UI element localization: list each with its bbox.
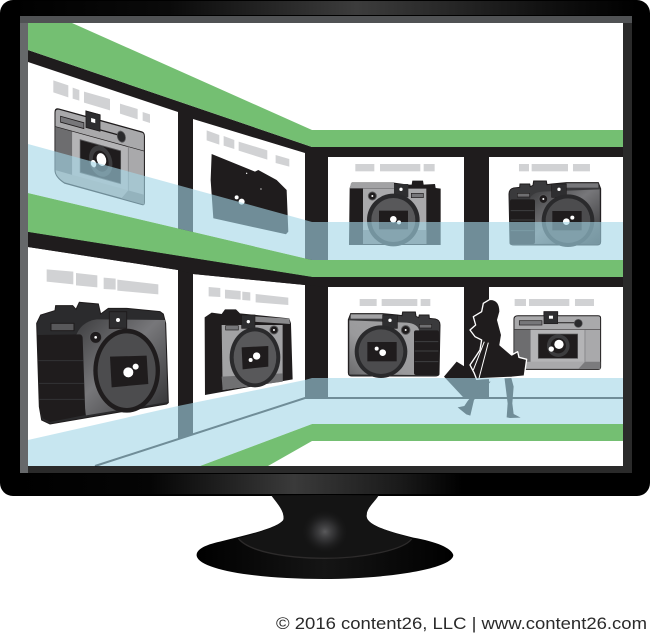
legs — [458, 377, 521, 418]
body with outline — [470, 299, 527, 379]
third display labels — [355, 164, 435, 171]
camera: black sided angled — [205, 309, 293, 395]
camera: grip right — [348, 312, 440, 378]
panel: upper second display — [193, 119, 305, 260]
middle green band — [28, 193, 623, 277]
panel: upper third display — [328, 157, 464, 262]
floor white area — [95, 398, 623, 466]
copyright line: © 2016 content26, LLC | www.content26.com — [276, 614, 647, 633]
upper left labels — [53, 80, 150, 123]
screen — [28, 23, 623, 466]
left bag — [444, 362, 482, 397]
black beam under middle band — [28, 232, 623, 287]
camera: grip left — [509, 181, 601, 247]
camera: large black angled — [37, 302, 168, 424]
camera: black silhouette — [211, 154, 288, 234]
second display labels — [207, 130, 289, 167]
panel: lower fourth display — [489, 287, 623, 398]
panel: upper left display — [28, 62, 178, 250]
black wall structure — [28, 50, 623, 466]
fourth display labels — [519, 164, 590, 171]
panel: upper fourth display — [489, 157, 623, 262]
lower third labels — [360, 299, 430, 306]
upper water reflection — [28, 144, 623, 260]
floor line — [95, 398, 623, 466]
lower fourth labels — [515, 299, 594, 306]
panel: lower left display — [28, 247, 178, 466]
panel: lower second display — [193, 274, 305, 434]
monitor bezel — [0, 0, 650, 496]
lower left labels — [47, 269, 158, 294]
camera: silver compact front — [514, 312, 601, 369]
camera: black sided front view — [349, 181, 441, 246]
lower water reflection — [28, 378, 623, 466]
panel: lower third display — [328, 287, 464, 398]
top green band — [28, 23, 623, 147]
monitor stand — [197, 495, 453, 579]
lower second labels — [209, 287, 288, 305]
camera: silver compact angled — [55, 103, 144, 205]
woman walking silhouette — [444, 299, 527, 418]
lower green band — [200, 424, 623, 466]
